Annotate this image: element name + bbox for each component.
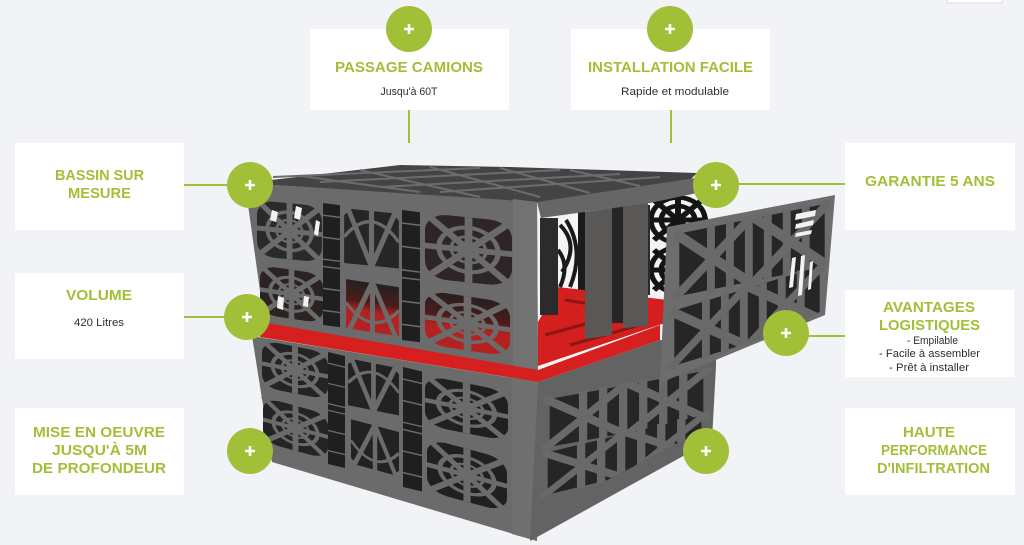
- icon: plus volume: [224, 294, 270, 340]
- text: logistic list: - Empilable: [907, 335, 958, 347]
- panel: mise en oeuvre: [15, 408, 184, 495]
- text: rapide et modulable: Rapide et modulable: [621, 86, 729, 98]
- white gaps in panel: [789, 210, 816, 296]
- heading: installation facile: INSTALLATION FACILE: [588, 59, 753, 76]
- icon: plus garantie: [693, 162, 739, 208]
- heading: bassin sur mesure: BASSIN SUR: [55, 167, 144, 184]
- heading: haute performance: [877, 424, 990, 477]
- panel: garantie: [845, 143, 1015, 230]
- panel: passage camions: [310, 29, 509, 110]
- heading: bassin sur mesure: MESURE: [68, 185, 131, 202]
- text: load capacity: Jusqu'à 60T: [380, 86, 438, 98]
- heading: haute performance: D'INFILTRATION: [877, 460, 990, 477]
- text: logistic list: - Facile à assembler: [879, 348, 980, 360]
- heading: mise en oeuvre: MISE EN OEUVRE: [33, 424, 165, 441]
- panel: bassin sur mesure: [15, 143, 184, 230]
- open interior: [538, 190, 712, 370]
- heading: mise en oeuvre: DE PROFONDEUR: [32, 460, 166, 477]
- text: logistic list: [879, 335, 980, 374]
- small top right tab: [947, 0, 1002, 3]
- panel: installation facile: [571, 29, 770, 110]
- lower block right face: [530, 340, 716, 541]
- lower block left face: [252, 336, 538, 541]
- pillars: [540, 218, 558, 315]
- panel: volume: [15, 273, 184, 359]
- heading: bassin sur mesure: [55, 167, 144, 202]
- heading: haute performance: PERFORMANCE: [881, 442, 987, 459]
- heading: avantages logistiques: [879, 299, 980, 334]
- icon: plus bassin: [227, 162, 273, 208]
- white gaps in left wheels: [270, 206, 320, 310]
- connector lines: [184, 110, 845, 336]
- top grid face: [245, 165, 697, 203]
- heading: avantages logistiques: AVANTAGES: [883, 299, 975, 316]
- heading: volume: VOLUME: [66, 287, 132, 304]
- red floor: [538, 287, 668, 366]
- upper block rim: [537, 178, 697, 218]
- heading: mise en oeuvre: [32, 424, 166, 477]
- upper block left face: [245, 183, 538, 372]
- chart: tank crate illustration: [245, 165, 835, 541]
- icon: plus haute performance: [683, 428, 729, 474]
- heading: passage camions: PASSAGE CAMIONS: [335, 59, 483, 76]
- heading: mise en oeuvre: JUSQU'À 5M: [52, 442, 147, 459]
- panel: haute performance: [845, 408, 1015, 495]
- heading: avantages logistiques: LOGISTIQUES: [879, 317, 980, 334]
- removable side panel: [660, 195, 835, 383]
- icon: plus mise en oeuvre: [227, 428, 273, 474]
- icon: plus installation facile: [647, 6, 693, 52]
- red band: [260, 322, 660, 382]
- icon: plus passage camions: [386, 6, 432, 52]
- text: 420 litres: 420 Litres: [74, 317, 125, 329]
- text: logistic list: - Prêt à installer: [889, 362, 969, 374]
- heading: haute performance: HAUTE: [903, 424, 955, 441]
- panel: avantages logistiques: [845, 290, 1014, 377]
- icon: plus avantages: [763, 310, 809, 356]
- heading: garantie 5 ans: GARANTIE 5 ANS: [865, 173, 995, 190]
